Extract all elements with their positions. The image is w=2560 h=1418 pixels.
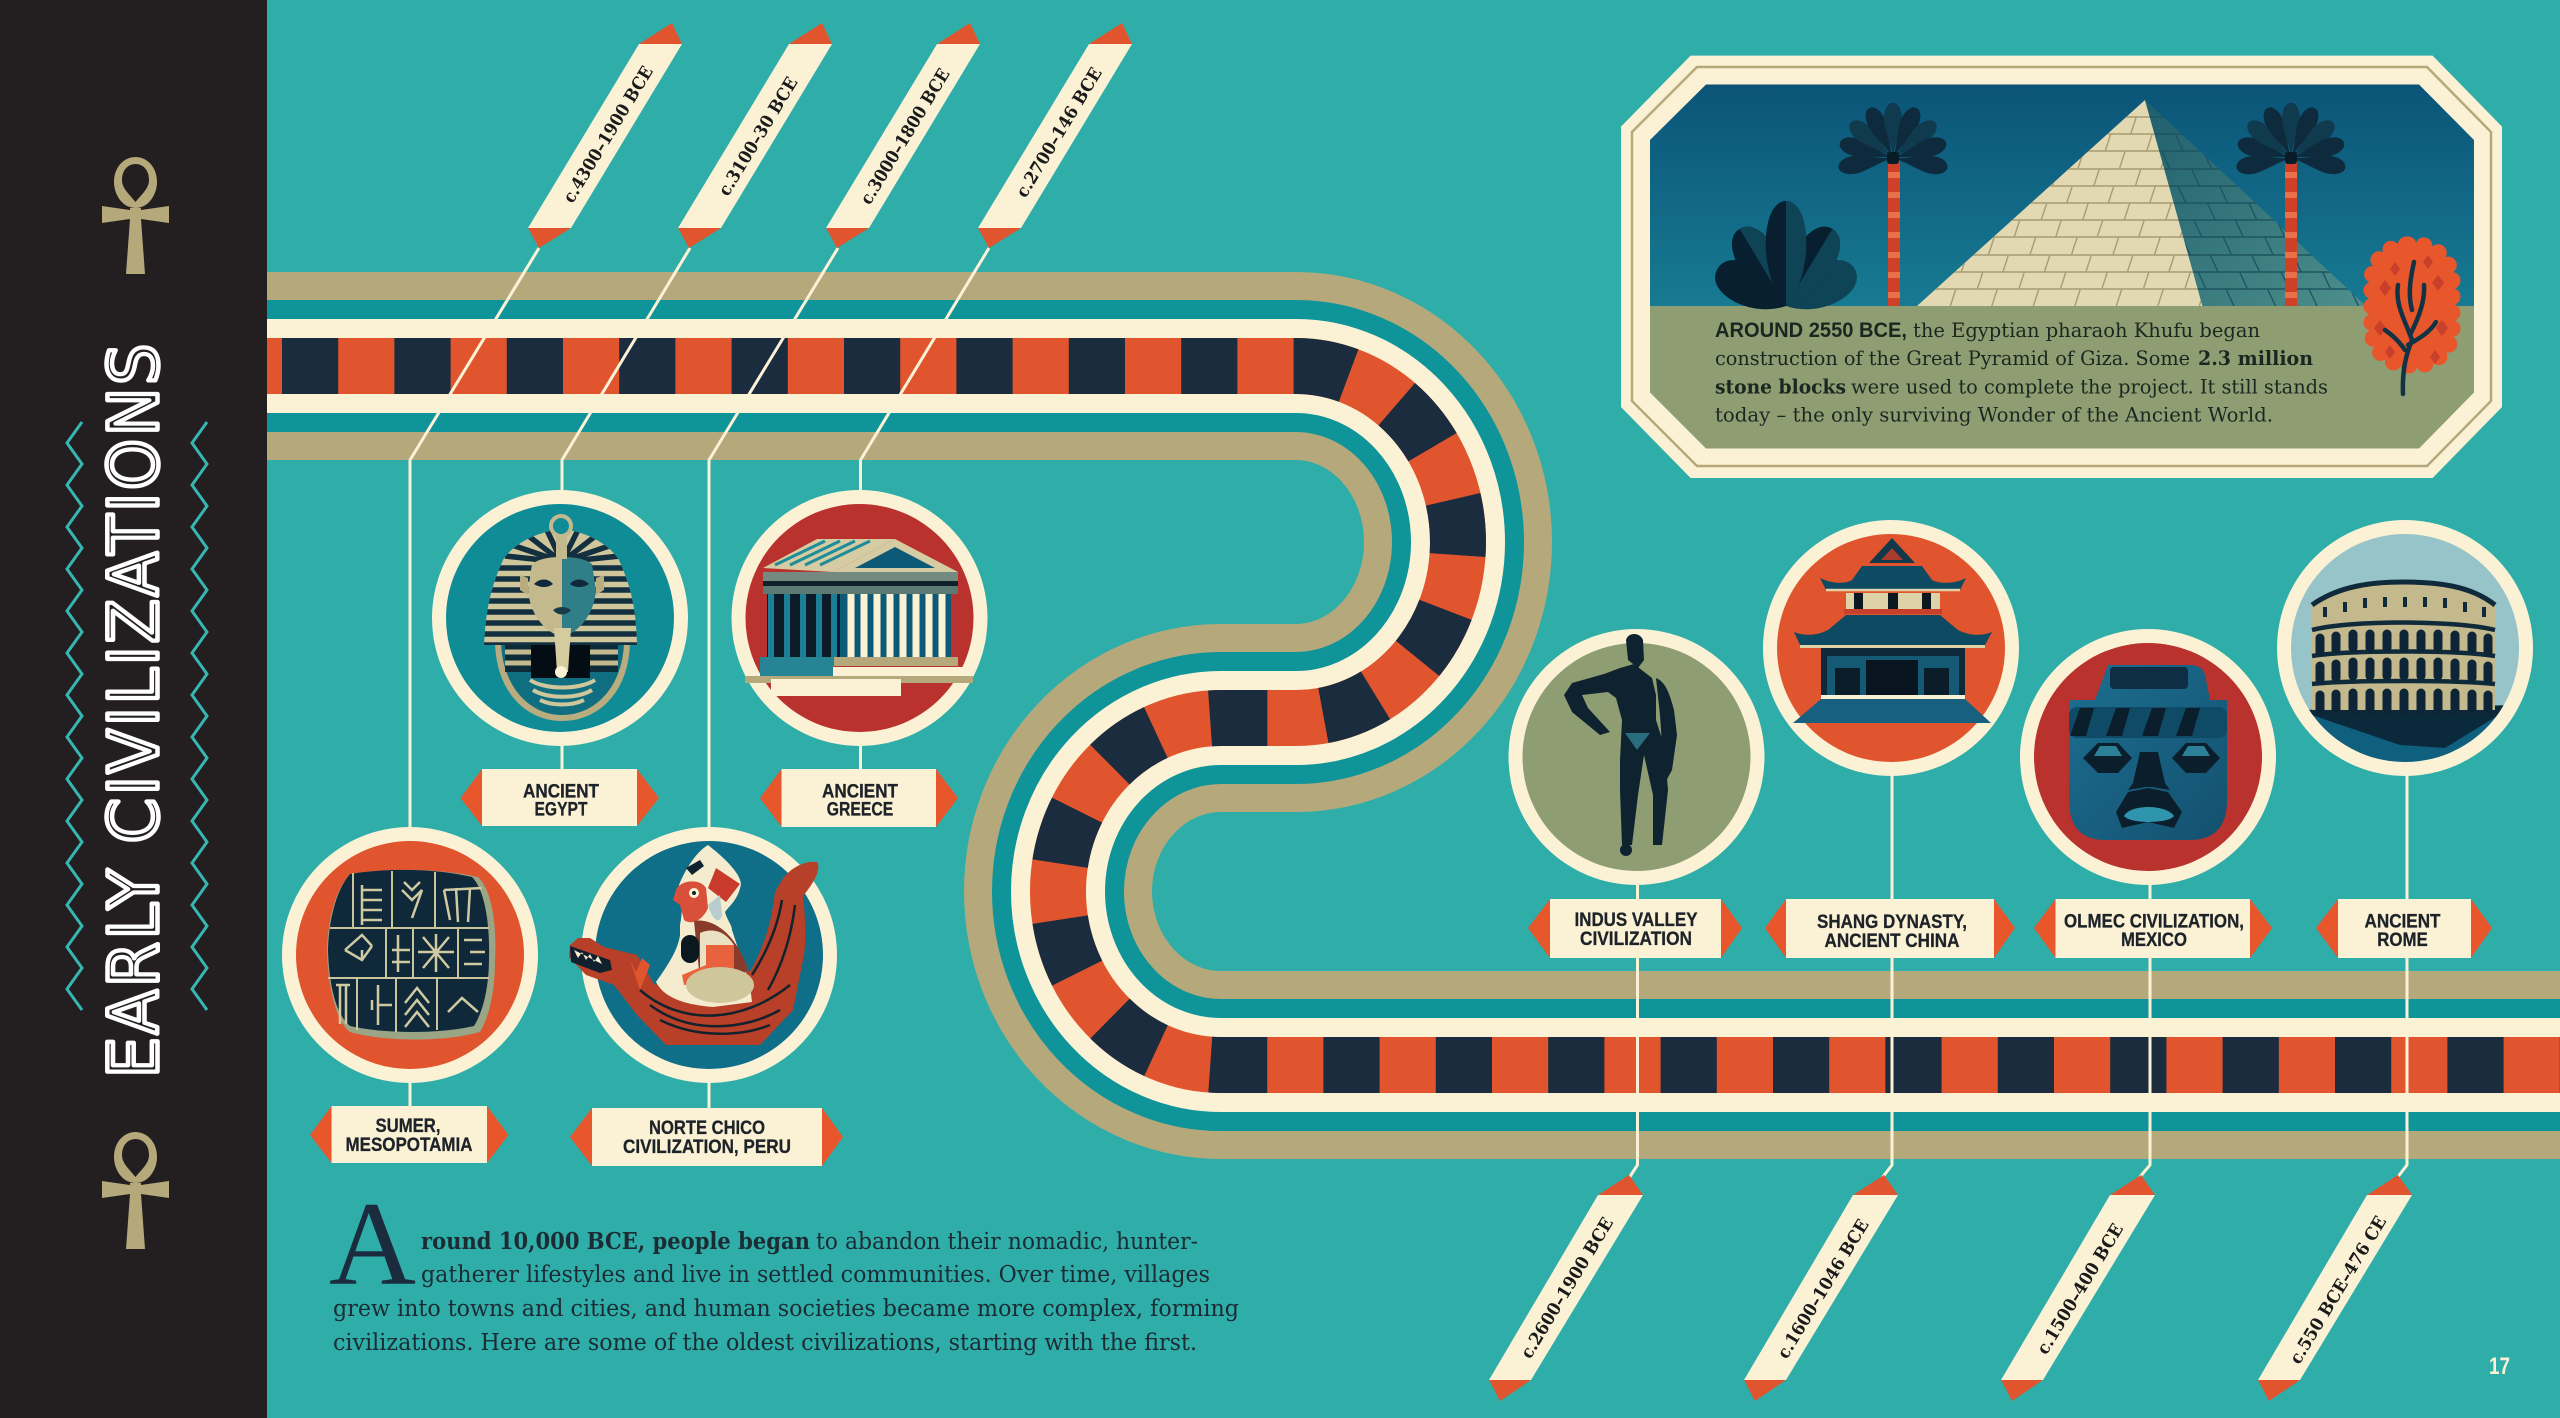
left palm xyxy=(1837,103,1949,306)
date flag: Rome: c.550 BCE–476 CE xyxy=(2286,1213,2391,1368)
date flag: Indus: c.2600–1900 BCE xyxy=(1517,1214,1618,1362)
label: Norte Chico: CIVILIZATION, PERU xyxy=(623,1136,791,1158)
label: Norte Chico xyxy=(570,1108,843,1166)
date flag: Sumer: c.4300–1900 BCE xyxy=(560,63,658,207)
left zigzag xyxy=(67,422,82,1010)
date flag: Norte Chico: c.3000–1800 BCE xyxy=(857,65,955,208)
seated figure xyxy=(656,845,754,1007)
intro text block: gatherer lifestyles and live in settled communities. Over time, villages xyxy=(421,1262,1210,1288)
label: Ancient Rome: ROME xyxy=(2377,929,2428,951)
winding timeline track xyxy=(267,366,2560,1065)
panel frame xyxy=(1621,56,2502,478)
date flag: Greece xyxy=(978,23,1132,248)
label: Sumer xyxy=(310,1106,508,1163)
sidebar title: EARLY CIVILIZATIONS xyxy=(94,341,174,1078)
panel text: the Egyptian pharaoh Khufu began xyxy=(1913,318,2260,342)
Tutankhamun mask xyxy=(484,516,640,721)
label: Shang Dynasty: ANCIENT CHINA xyxy=(1824,930,1960,952)
label: Olmec: OLMEC CIVILIZATION, xyxy=(2064,910,2244,932)
panel text: were used to complete the project. It still stands xyxy=(1851,374,2328,398)
label: Ancient Egypt: ANCIENT xyxy=(523,780,599,802)
panel text: construction of the Great Pyramid of Giza. Some xyxy=(1715,346,2190,370)
label: Indus Valley: CIVILIZATION xyxy=(1580,928,1692,950)
label: Ancient Greece: ANCIENT xyxy=(822,780,898,802)
label: Ancient Egypt xyxy=(460,769,659,826)
circle: Norte Chico figure xyxy=(569,827,837,1083)
label: Olmec: MEXICO xyxy=(2121,929,2187,951)
circle: Shang pagoda xyxy=(1763,520,2019,776)
circle: Ancient Greece temple xyxy=(732,490,988,746)
label: Olmec xyxy=(2034,899,2272,958)
right zigzag xyxy=(192,422,207,1010)
label: Ancient Greece xyxy=(760,769,958,827)
panel text: stone blocks xyxy=(1715,374,1846,398)
dancing girl statue xyxy=(1564,634,1677,856)
intro text block: round 10,000 BCE, people began xyxy=(421,1228,810,1255)
date flag: Rome xyxy=(2258,1175,2412,1401)
date flag: Sumer xyxy=(528,23,682,248)
panel text: today – the only surviving Wonder of the Ancient World. xyxy=(1715,402,2273,426)
panel text xyxy=(1715,318,2328,426)
label: Sumer: MESOPOTAMIA xyxy=(346,1134,472,1156)
connector lines xyxy=(410,248,2407,1178)
intro text block: civilizations. Here are some of the oldest civilizations, starting with the first. xyxy=(333,1330,1197,1356)
colossal head xyxy=(2069,665,2227,840)
date flag: Shang xyxy=(1744,1175,1898,1401)
date flag: Norte Chico xyxy=(826,23,980,248)
intro text block: grew into towns and cities, and human societies became more complex, forming xyxy=(333,1296,1239,1322)
colosseum xyxy=(2309,580,2504,762)
label: Indus Valley xyxy=(1528,899,1742,958)
icon: bottom ankh xyxy=(102,1132,169,1249)
pyramid xyxy=(1917,100,2364,306)
date flag: Olmec xyxy=(2001,1175,2155,1401)
circle: Indus Valley figure xyxy=(1508,629,1764,885)
pyramid scene xyxy=(1650,84,2560,449)
label: Shang Dynasty xyxy=(1765,899,2015,958)
date flag: Shang: c.1600–1046 BCE xyxy=(1774,1216,1874,1363)
intro text block: to abandon their nomadic, hunter- xyxy=(816,1229,1198,1255)
Parthenon xyxy=(745,539,973,696)
panel text: 2.3 million xyxy=(2198,346,2313,370)
right palm xyxy=(2235,103,2347,306)
intro text block xyxy=(329,1177,1239,1356)
date flag: Indus xyxy=(1489,1175,1643,1401)
sidebar xyxy=(0,0,267,1418)
date flag: Greece: c.2700–146 BCE xyxy=(1013,64,1107,201)
label: Indus Valley: INDUS VALLEY xyxy=(1574,909,1698,931)
date flag: Olmec: c.1500–400 BCE xyxy=(2033,1221,2128,1358)
circle: Ancient Rome Colosseum xyxy=(2277,520,2533,776)
label: Ancient Rome: ANCIENT xyxy=(2364,910,2441,932)
pagoda xyxy=(1793,538,1992,723)
panel text: AROUND 2550 BCE, xyxy=(1715,319,1907,342)
tablet xyxy=(327,870,495,1040)
panel: Great Pyramid xyxy=(1621,56,2560,478)
drop cap: A xyxy=(329,1177,416,1310)
label: Sumer: SUMER, xyxy=(376,1115,440,1137)
page number: 17 xyxy=(2489,1353,2510,1380)
label: Ancient Greece: GREECE xyxy=(827,798,893,820)
orange tree xyxy=(2372,245,2452,394)
date flag: Egypt: c.3100–30 BCE xyxy=(715,74,802,200)
label: Ancient Rome xyxy=(2316,899,2492,958)
circle: Ancient Egypt mask xyxy=(432,490,688,746)
boat-shaped vessel figure xyxy=(569,845,818,1045)
label: Norte Chico: NORTE CHICO xyxy=(649,1117,765,1139)
bush xyxy=(1715,201,1857,310)
label: Shang Dynasty: SHANG DYNASTY, xyxy=(1817,911,1967,933)
icon: top ankh xyxy=(102,157,169,274)
circle: Sumer clay tablet xyxy=(282,827,538,1083)
label: Ancient Egypt: EGYPT xyxy=(534,798,588,820)
circle: Olmec head xyxy=(2020,629,2276,885)
date flag: Egypt xyxy=(678,23,832,248)
